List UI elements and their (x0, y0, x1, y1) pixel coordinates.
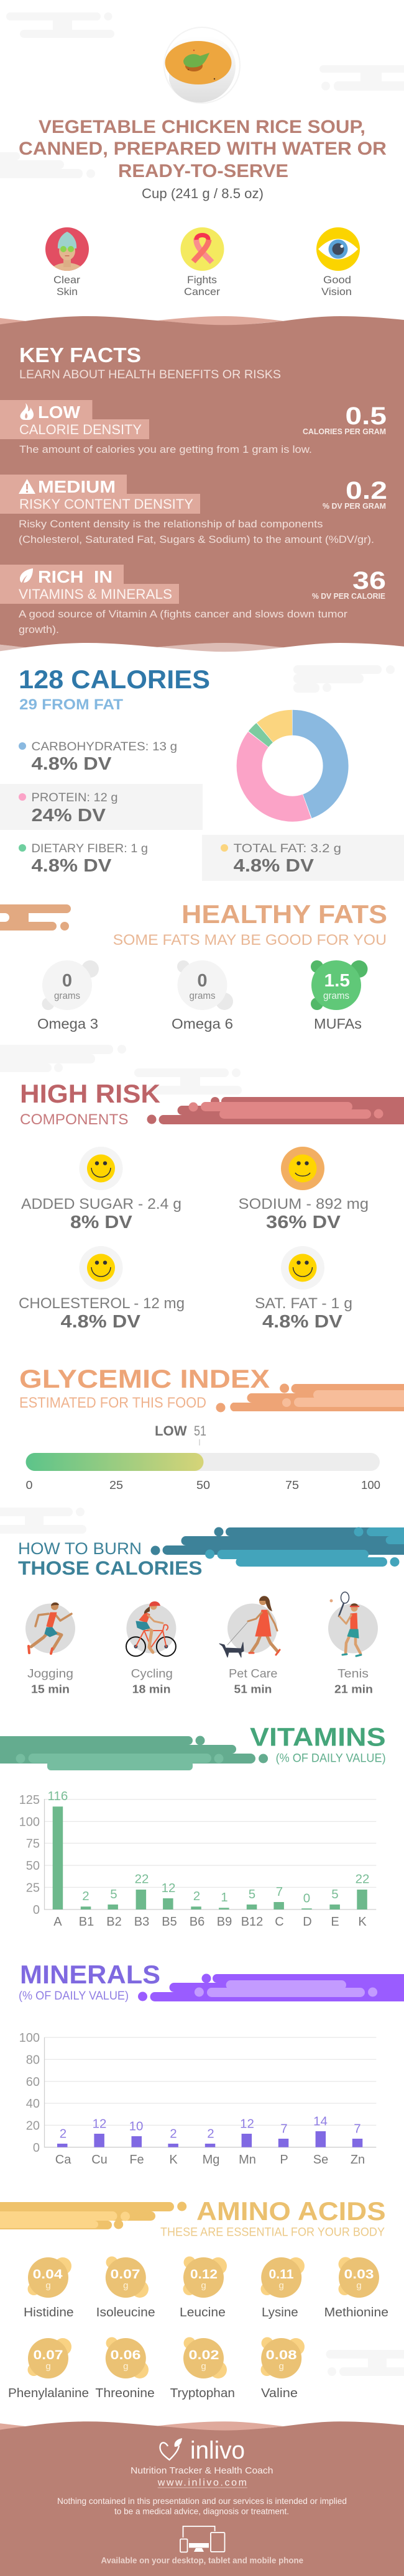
disclaimer (57, 2496, 347, 2516)
heading: AMINO ACIDS (196, 2196, 386, 2226)
x axis labels: C (275, 1915, 284, 1929)
threonine (95, 2337, 155, 2400)
unit: % DV PER GRAM (323, 501, 386, 511)
title: CANNED, PREPARED WITH WATER OR (19, 139, 387, 159)
panel: high risk (19, 1079, 404, 1332)
histidine: g (45, 2280, 51, 2291)
wave and background (0, 316, 404, 652)
heading (19, 1364, 270, 1411)
y axis labels (19, 1793, 40, 1917)
value labels: 2 (193, 1889, 200, 1903)
heading: HOW TO BURN (18, 1539, 142, 1558)
phenylalanine: 0.07 (34, 2348, 63, 2362)
mufas: 1.5 (324, 971, 350, 991)
heading: GLYCEMIC INDEX (19, 1364, 270, 1393)
y axis labels: 80 (26, 2054, 40, 2067)
x axis labels: B6 (190, 1915, 204, 1929)
value: 36: 36 (352, 567, 386, 594)
isoleucine: g (123, 2280, 128, 2291)
heading: THOSE CALORIES (18, 1557, 203, 1579)
x axis labels: K (169, 2153, 178, 2167)
icon: flame (21, 403, 34, 420)
highlight boxes (0, 565, 179, 604)
heading: HIGH RISK (20, 1079, 160, 1108)
label: fights cancer (184, 274, 220, 298)
value labels: 2 (60, 2127, 67, 2141)
y axis labels: 100 (19, 1815, 40, 1829)
threonine: g (123, 2361, 128, 2372)
saturated fat (255, 1246, 352, 1332)
value labels: 12 (93, 2117, 106, 2131)
panel: vitamins (0, 1723, 386, 1929)
x axis labels: B3 (134, 1915, 149, 1929)
label: good vision: Vision (321, 286, 352, 298)
gauge scale: 100 (361, 1478, 380, 1491)
value labels: 7 (276, 1885, 283, 1899)
tryptophan: 0.02 (189, 2348, 219, 2362)
label: fights cancer: Fights (187, 274, 217, 286)
leucine (180, 2256, 227, 2319)
icon: tennis player (329, 1592, 361, 1656)
icon: warning triangle (19, 479, 35, 494)
heading (19, 1960, 160, 2003)
valine: g (279, 2361, 284, 2372)
leucine: Leucine (180, 2306, 226, 2319)
icon: leaf (20, 568, 33, 583)
header shape (216, 1384, 404, 1413)
activity: pet care (219, 1596, 280, 1696)
heading: MINERALS (20, 1960, 160, 1989)
omega 6: Omega 6 (172, 1016, 233, 1032)
header shape (0, 1736, 268, 1770)
protein (19, 791, 118, 826)
added sugar: ADDED SUGAR - 2.4 g (21, 1196, 181, 1213)
methionine: g (356, 2280, 362, 2291)
fact: calorie density (0, 400, 387, 455)
tryptophan: g (201, 2361, 206, 2372)
omega 3: Omega 3 (37, 1016, 98, 1032)
activity: pet care: 51 min (234, 1683, 272, 1696)
activity: tennis (328, 1592, 378, 1696)
heading (113, 899, 387, 949)
label: medium: MEDIUM (38, 477, 116, 496)
panel: healthy fats (0, 899, 387, 1032)
value labels: 7 (354, 2122, 361, 2136)
y axis labels: 125 (19, 1793, 40, 1807)
value labels: 22 (356, 1872, 369, 1886)
protein: PROTEIN: 12 g (31, 791, 118, 804)
lysine: 0.11 (269, 2267, 294, 2282)
label: fights cancer: Cancer (184, 286, 220, 298)
leucine: 0.12 (190, 2267, 218, 2282)
fact: rich in vitamins and minerals (0, 565, 386, 635)
panel: glycemic index (19, 1364, 404, 1491)
histidine (24, 2257, 74, 2319)
heading: LEARN ABOUT HEALTH BENEFITS OR RISKS (19, 368, 281, 381)
label and time: Cycling (131, 1668, 173, 1681)
x axis labels: Zn (351, 2153, 365, 2167)
disclaimer: Nothing contained in this presentation and our services is intended or implied (57, 2496, 347, 2506)
label: clear skin: Clear (53, 274, 80, 286)
activity: jogging (25, 1603, 75, 1696)
heading (19, 344, 281, 381)
header shape (0, 904, 71, 931)
valine: 0.08 (266, 2348, 297, 2362)
header shape (150, 1527, 404, 1567)
fact: risky content density (0, 475, 387, 545)
label: clear skin (53, 274, 80, 298)
background cloud (326, 2350, 404, 2376)
y axis labels: 40 (26, 2097, 40, 2111)
sodium: 36% DV (266, 1213, 341, 1232)
mufas: grams (323, 991, 349, 1001)
y axis labels: 0 (33, 1903, 40, 1917)
x axis labels: B5 (162, 1915, 177, 1929)
y axis labels: 0 (33, 2141, 40, 2155)
panel: minerals (19, 1960, 404, 2167)
lysine: g (279, 2280, 284, 2291)
value labels: 1 (221, 1890, 228, 1905)
background clouds: high risk (0, 1045, 242, 1095)
heading (20, 1079, 160, 1128)
label: rich in: RICH IN (38, 567, 112, 586)
label and time: Tenis (337, 1668, 369, 1681)
value labels: 12 (240, 2117, 254, 2131)
x axis labels: K (358, 1915, 367, 1929)
icon: fights cancer ribbon (180, 227, 224, 271)
threonine: Threonine (95, 2387, 155, 2400)
description: growth). (19, 624, 59, 635)
gauge scale: 0 (26, 1478, 32, 1491)
gauge scale: 25 (109, 1478, 123, 1491)
leucine: g (201, 2280, 206, 2291)
y axis labels: 75 (26, 1837, 40, 1851)
title: READY-TO-SERVE (118, 161, 288, 181)
x axis labels: B12 (241, 1915, 263, 1929)
value labels: 22 (135, 1872, 149, 1886)
activity: cycling: 18 min (132, 1683, 170, 1696)
label and time: Jogging (27, 1668, 73, 1681)
title (19, 117, 387, 181)
value labels: 2 (82, 1889, 90, 1903)
x axis labels: E (331, 1915, 339, 1929)
label: risky content density: RISKY CONTENT DENSITY (19, 496, 193, 512)
carbohydrates: CARBOHYDRATES: 13 g (31, 740, 177, 753)
icon: clear skin (45, 227, 89, 271)
y axis labels: 20 (26, 2119, 40, 2133)
activity: cycling (126, 1601, 176, 1696)
omega 6 (172, 960, 233, 1032)
description: The amount of calories you are getting from 1 gram is low. (19, 444, 312, 455)
y axis labels: 50 (26, 1859, 40, 1873)
value labels: 116 (48, 1789, 68, 1803)
heading: SOME FATS MAY BE GOOD FOR YOU (113, 932, 387, 949)
icon: good vision eye (316, 227, 360, 271)
description: A good source of Vitamin A (fights cancer and slows down tumor (19, 608, 347, 620)
y axis labels: 60 (26, 2075, 40, 2089)
x axis labels: Se (313, 2153, 328, 2167)
phenylalanine (8, 2338, 89, 2400)
label: vitamins and minerals: VITAMINS & MINERALS (19, 586, 172, 602)
x axis labels (55, 2153, 365, 2167)
food image: soup bowl (164, 27, 240, 103)
bar chart: vitamins (19, 1789, 376, 1929)
saturated fat: SAT. FAT - 1 g (255, 1295, 352, 1312)
heading: HEALTHY FATS (181, 899, 387, 929)
added sugar (21, 1147, 181, 1232)
description: Risky Content density is the relationship of bad components (19, 518, 323, 530)
row backgrounds (0, 784, 404, 881)
heading: VITAMINS (250, 1723, 386, 1752)
mufas: MUFAs (314, 1016, 362, 1032)
protein: 24% DV (31, 806, 106, 826)
threonine: 0.06 (111, 2348, 140, 2362)
lysine: Lysine (262, 2306, 298, 2319)
heading: (% OF DAILY VALUE) (276, 1752, 386, 1765)
panel: how to burn those calories (18, 1527, 404, 1696)
x axis labels: Cu (91, 2153, 108, 2167)
icon: cyclist (126, 1601, 176, 1656)
y axis labels: 25 (26, 1881, 40, 1895)
header shape (138, 1974, 404, 2001)
mufas (311, 960, 368, 1032)
methionine: Methionine (324, 2306, 388, 2319)
value labels: 0 (303, 1891, 310, 1906)
label: calorie density: CALORIE DENSITY (19, 422, 142, 437)
activity: tennis: 21 min (334, 1683, 373, 1696)
logo: inlivo: inlivo (190, 2437, 245, 2464)
value: 0.2: 0.2 (346, 477, 387, 504)
value labels: 5 (331, 1887, 339, 1901)
value labels: 5 (110, 1887, 117, 1901)
cholesterol: 4.8% DV (61, 1312, 141, 1332)
value labels: 2 (207, 2127, 214, 2141)
tryptophan (170, 2337, 235, 2400)
logo: inlivo (160, 2437, 245, 2464)
value labels (48, 1789, 369, 1906)
heading (18, 1539, 203, 1579)
gauge label: LOW (155, 1423, 187, 1439)
omega 3: grams (54, 991, 80, 1001)
background clouds: header (0, 12, 404, 178)
disclaimer: to be a medical advice, diagnosis or treatment. (114, 2506, 289, 2516)
description (19, 518, 374, 545)
heading: 128 CALORIES (19, 665, 210, 694)
lysine (261, 2257, 305, 2319)
x axis labels: D (303, 1915, 312, 1929)
y axis labels (19, 2031, 40, 2155)
heading: ESTIMATED FOR THIS FOOD (19, 1395, 206, 1411)
value labels: 14 (313, 2114, 328, 2128)
title: VEGETABLE CHICKEN RICE SOUP, (39, 117, 365, 137)
panel: footer (0, 2421, 404, 2576)
carbohydrates (19, 740, 177, 774)
tagline: Nutrition Tracker & Health Coach (131, 2465, 273, 2476)
value labels: 10 (129, 2119, 143, 2133)
isoleucine: Isoleucine (96, 2306, 155, 2319)
carbohydrates: 4.8% DV (31, 754, 112, 774)
x axis labels: B1 (79, 1915, 94, 1929)
heading (19, 665, 210, 713)
header: food image and title (19, 27, 387, 201)
gauge bar (26, 1453, 380, 1471)
value labels: 5 (249, 1887, 255, 1901)
unit: % DV PER CALORIE (312, 591, 385, 601)
dietary fiber: 4.8% DV (31, 856, 112, 876)
heading: 29 FROM FAT (19, 696, 123, 713)
bar chart: minerals (19, 2031, 376, 2167)
total fat (221, 842, 341, 876)
methionine: 0.03 (344, 2267, 374, 2282)
valine: Valine (261, 2387, 298, 2400)
panel: calories (0, 665, 404, 881)
omega 6: 0 (197, 971, 208, 991)
heading: COMPONENTS (20, 1111, 128, 1128)
label: good vision (321, 274, 352, 298)
gauge scale (26, 1478, 380, 1491)
isoleucine (96, 2256, 155, 2319)
label: good vision: Good (323, 274, 351, 286)
dietary fiber (19, 842, 148, 876)
bars (53, 1806, 367, 1909)
omega 3: 0 (62, 971, 72, 991)
x axis labels: Ca (55, 2153, 71, 2167)
header shape (147, 1097, 404, 1124)
isoleucine: 0.07 (111, 2267, 140, 2282)
cholesterol: CHOLESTEROL - 12 mg (19, 1295, 185, 1312)
phenylalanine: g (45, 2361, 51, 2372)
x axis labels (53, 1915, 367, 1929)
heading (250, 1723, 386, 1765)
sodium: SODIUM - 892 mg (239, 1196, 369, 1213)
serving size: Cup (241 g / 8.5 oz) (142, 186, 264, 201)
gauge label (155, 1423, 206, 1445)
omega 6: grams (189, 991, 215, 1001)
added sugar: 8% DV (70, 1213, 132, 1232)
panel: key facts (0, 316, 404, 652)
x axis labels: Mg (203, 2153, 219, 2167)
total fat: 4.8% DV (234, 856, 314, 876)
activity: jogging: 15 min (31, 1683, 70, 1696)
sodium (239, 1147, 369, 1232)
icon: jogger (29, 1603, 71, 1654)
health benefits (45, 227, 360, 298)
dietary fiber: DIETARY FIBER: 1 g (31, 842, 148, 855)
x axis labels: B9 (217, 1915, 232, 1929)
phenylalanine: Phenylalanine (8, 2387, 89, 2400)
availability note: Available on your desktop, tablet and mobile phone (101, 2556, 303, 2565)
tryptophan: Tryptophan (170, 2387, 235, 2400)
wave and background (0, 2421, 404, 2576)
histidine: 0.04 (33, 2267, 63, 2282)
highlight boxes (0, 475, 200, 514)
icon: devices (180, 2526, 225, 2552)
description (19, 608, 347, 635)
icon: dog walker (219, 1596, 280, 1657)
valine (261, 2337, 305, 2400)
gauge scale: 75 (285, 1478, 299, 1491)
description: (Cholesterol, Saturated Fat, Sugars & Sodium) to the amount (%DV/gr). (19, 534, 374, 545)
value labels: 12 (162, 1881, 175, 1895)
gauge scale: 50 (196, 1478, 210, 1491)
bars (57, 2131, 362, 2147)
cholesterol (19, 1246, 185, 1332)
x axis labels: B2 (106, 1915, 122, 1929)
highlight boxes (0, 400, 149, 439)
background cloud: burn calories (0, 1508, 86, 1534)
y axis labels: 100 (19, 2031, 40, 2045)
label: clear skin: Skin (57, 286, 78, 298)
website link: www.inlivo.com (157, 2478, 247, 2488)
gauge label: 51 (194, 1423, 206, 1439)
header shape (0, 2201, 186, 2229)
value labels (60, 2114, 361, 2141)
heading: KEY FACTS (19, 344, 141, 366)
panel: amino acids (0, 2196, 404, 2400)
x axis labels: Fe (129, 2153, 144, 2167)
omega 3 (37, 960, 99, 1032)
total fat: TOTAL FAT: 3.2 g (234, 842, 341, 855)
x axis labels: A (53, 1915, 62, 1929)
heading: THESE ARE ESSENTIAL FOR YOUR BODY (160, 2226, 385, 2239)
label and time: Pet Care (229, 1668, 277, 1681)
saturated fat: 4.8% DV (262, 1312, 343, 1332)
value: 0.5: 0.5 (346, 403, 387, 430)
histidine: Histidine (24, 2306, 74, 2319)
background cloud (293, 665, 395, 693)
x axis labels: Mn (239, 2153, 256, 2167)
methionine (324, 2257, 388, 2319)
heading (160, 2196, 386, 2239)
value labels: 7 (280, 2122, 288, 2136)
label: low: LOW (38, 403, 81, 422)
heading: (% OF DAILY VALUE) (19, 1990, 129, 2003)
donut chart (249, 722, 336, 809)
unit: CALORIES PER GRAM (303, 427, 386, 436)
value labels: 2 (170, 2127, 177, 2141)
x axis labels: P (280, 2153, 288, 2167)
